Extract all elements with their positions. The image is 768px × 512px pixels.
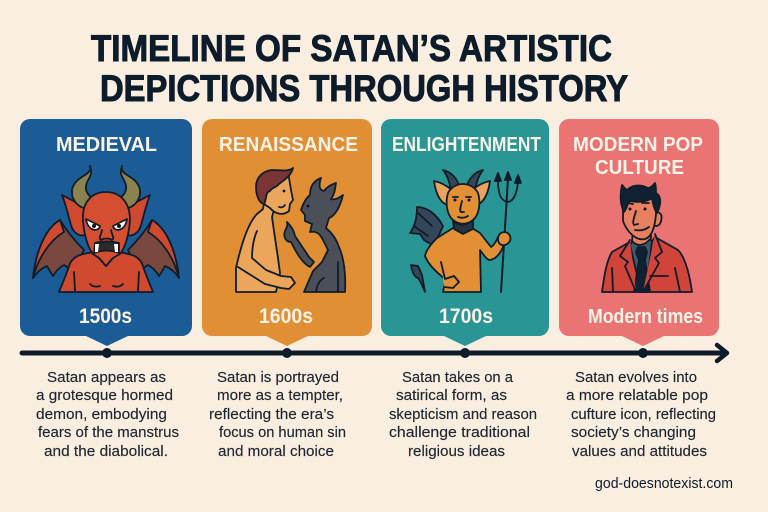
title: TIMELINE OF SATAN’S ARTISTIC [91,28,612,69]
heading: modern pop culture: CULTURE [595,156,684,179]
icon: man and dark tempter [236,168,345,292]
text block: renaissance description: and moral choice [218,443,334,460]
footer url: god-doesnotexist.com [595,476,733,492]
text block: renaissance description: focus on human sin [219,424,346,441]
icon: red horned demon [33,166,179,292]
panel: modern pop culture [559,119,719,346]
text block: modern description: Satan evolves into [575,369,697,386]
date: 1700s: 1700s [439,305,493,328]
date: modern times: Modern times [588,306,703,328]
panel: enlightenment [381,119,549,346]
title [91,28,628,109]
heading: enlightenment: ENLIGHTENMENT [392,133,541,156]
text block: renaissance description [209,369,346,460]
heading: modern pop culture [573,133,703,179]
text block: renaissance description: reflecting the era’s [209,406,334,423]
icon: man in red suit with small horns [602,183,692,292]
heading: medieval: MEDIEVAL [56,133,157,156]
text block: modern description: values and attitudes [572,443,707,460]
text block: enlightenment description [389,369,537,460]
text block: medieval description [36,369,179,460]
text block: renaissance description: Satan is portrayed [217,369,339,386]
text block: medieval description: and the diabolical. [44,443,168,460]
text block: modern description [566,369,716,460]
date: 1500s: 1500s [79,305,132,328]
text block: medieval description: Satan appears as [47,369,166,386]
timeline arrow [22,345,727,361]
title: DEPICTIONS THROUGH HISTORY [100,68,628,109]
text block: medieval description: fears of the manstrus [38,424,179,441]
text block: enlightenment description: skepticism and reason [389,406,537,423]
text block: modern description: society’s changing [571,424,696,441]
text block: modern description: a more relatable pop [566,387,708,404]
panel: medieval [20,119,192,346]
heading: renaissance: RENAISSANCE [219,133,358,156]
text block: modern description: cufture icon, reflecting [571,406,716,423]
text block: enlightenment description: satirical form, as [396,387,507,404]
icon: satirical goat-horned devil with trident [410,170,521,292]
panel: renaissance [202,119,372,346]
text block: renaissance description: more as a tempter, [217,387,343,404]
text block: medieval description: demon, embodying [36,406,167,423]
text block: enlightenment description: Satan takes on a [402,369,514,386]
heading: modern pop culture: MODERN POP [573,133,703,156]
text block: enlightenment description: challenge traditional [389,424,530,441]
text block: enlightenment description: religious ideas [408,443,505,460]
date: 1600s: 1600s [259,305,313,328]
text block: medieval description: a grotesque hormed [36,387,173,404]
